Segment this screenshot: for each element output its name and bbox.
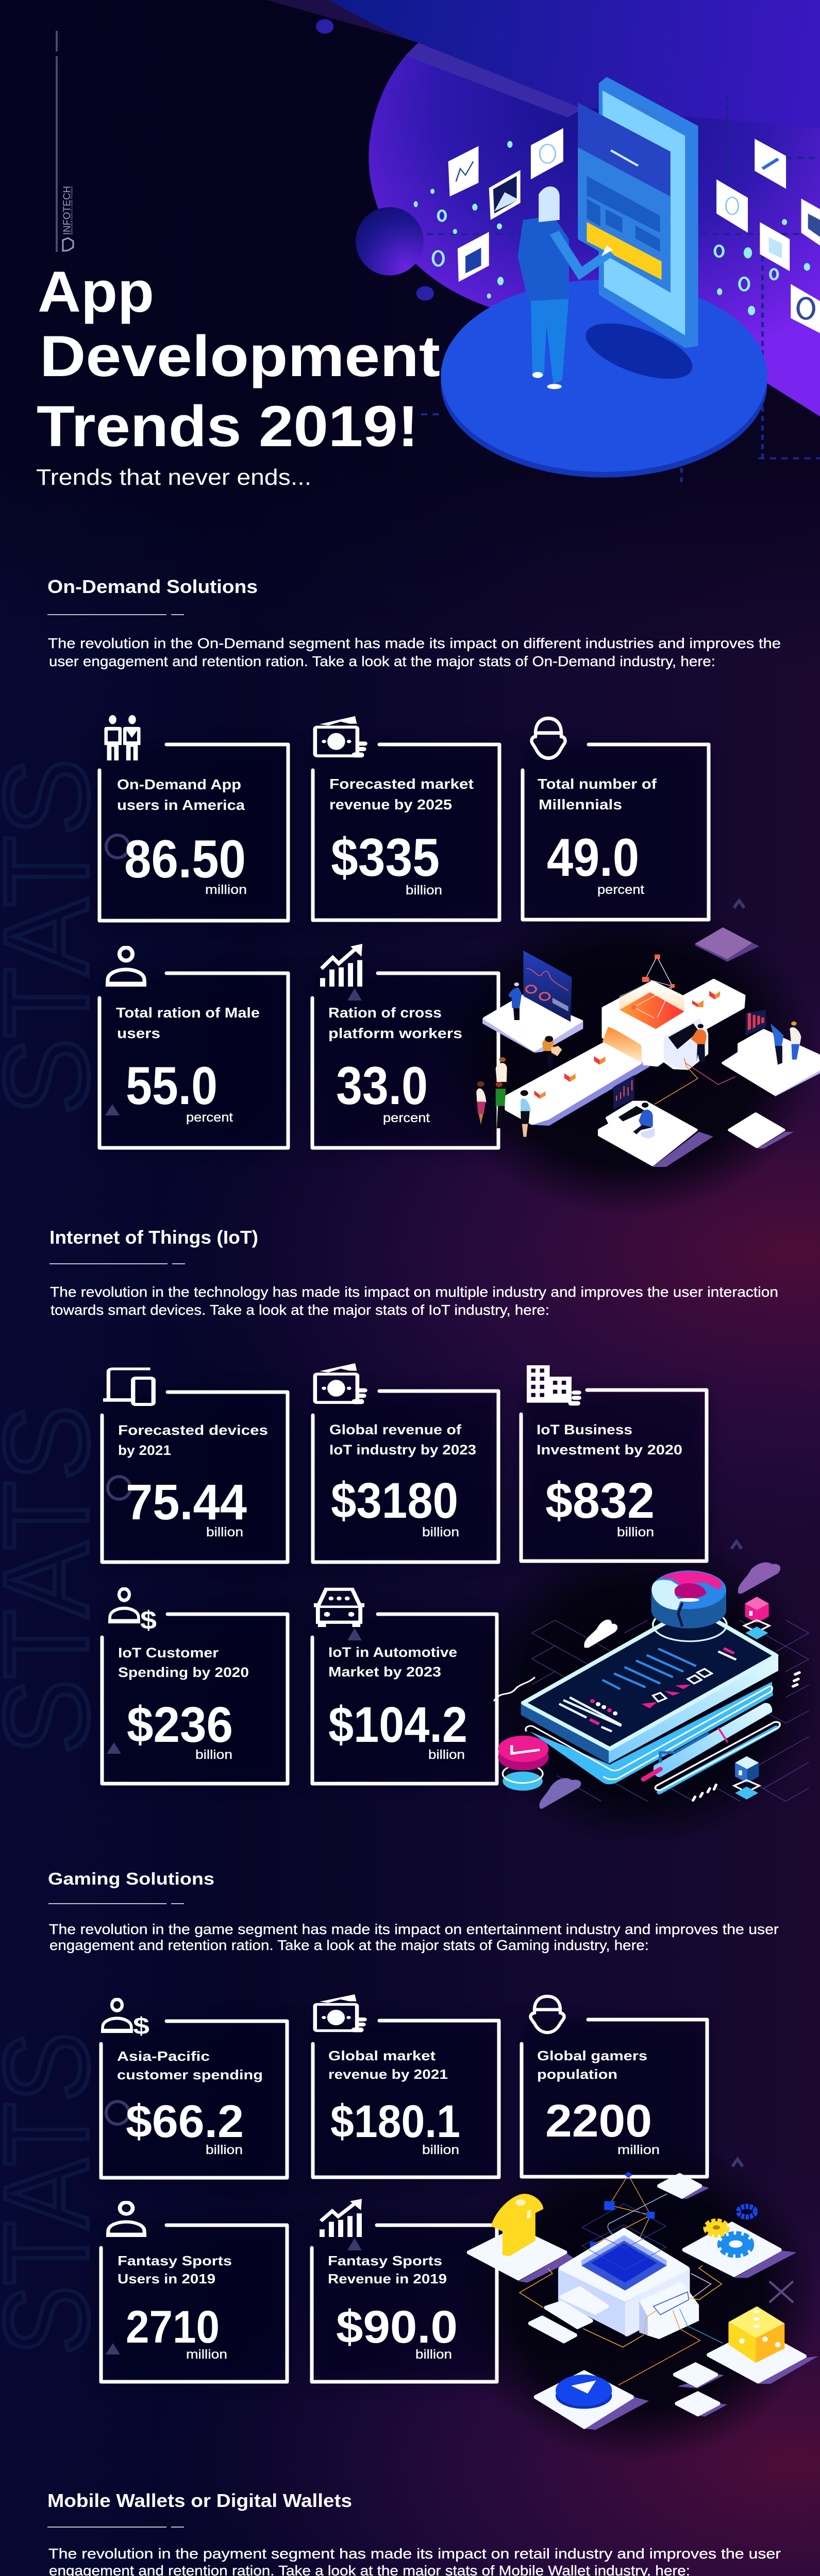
intro text: The revolution in the game segment has made its impact on entertainment industry and improves the user <box>49 1921 779 1937</box>
title: Development <box>40 324 440 388</box>
value: 49.0 <box>547 828 639 888</box>
icon: person with dollar: $ <box>140 1606 157 1635</box>
unit: million <box>186 2347 227 2362</box>
card label: Forecasted market <box>329 776 474 792</box>
card label <box>328 1645 457 1680</box>
value: 2710 <box>126 2301 220 2352</box>
intro text: engagement and retention ration. Take a look at the major stats of Gaming industry, here: <box>49 1937 649 1953</box>
icon: growth <box>320 2199 362 2237</box>
value: $236 <box>127 1697 233 1753</box>
icon: person <box>106 2202 146 2237</box>
unit: billion <box>406 883 442 897</box>
floating app icons <box>448 128 820 333</box>
card: business investment <box>521 1365 707 1561</box>
unit: billion <box>206 1525 243 1539</box>
card label: revenue by 2021 <box>328 2066 448 2082</box>
value: $3180 <box>331 1472 458 1529</box>
intro text: towards smart devices. Take a look at the major stats of IoT industry, here: <box>51 1302 549 1318</box>
card label: Revenue in 2019 <box>328 2271 447 2286</box>
icon: person with dollar <box>101 1999 149 2039</box>
card label <box>537 1422 682 1458</box>
card: cross platform <box>312 944 498 1148</box>
card: Asia-Pacific <box>101 1999 287 2178</box>
platform disc <box>441 280 767 478</box>
section: Mobile Wallets <box>47 2490 820 2576</box>
illustration: isometric tablet <box>494 1563 809 1809</box>
unit: billion <box>422 1525 459 1539</box>
intro text: The revolution in the On-Demand segment has made its impact on different industries and improves the <box>48 635 781 651</box>
card: automotive <box>312 1589 497 1784</box>
card label: Millennials <box>539 796 622 812</box>
value: 33.0 <box>336 1056 428 1116</box>
dark halos behind the stat cards <box>98 744 709 2576</box>
card label: On-Demand App <box>117 776 241 792</box>
value: $104.2 <box>328 1697 467 1753</box>
card label: by 2021 <box>118 1443 171 1458</box>
card label <box>329 776 474 812</box>
icon: person with dollar <box>108 1589 157 1635</box>
value: $832 <box>545 1472 655 1529</box>
card label: revenue by 2025 <box>329 796 452 812</box>
card label <box>118 1645 249 1680</box>
icon: car <box>314 1589 364 1627</box>
card: forecasted devices <box>102 1369 288 1562</box>
illustration: isometric factory <box>476 927 820 1167</box>
card label: Global market <box>328 2048 436 2063</box>
card label: Fantasy Sports <box>118 2253 232 2268</box>
card label: Market by 2023 <box>328 1664 441 1680</box>
card label: users <box>117 1025 160 1041</box>
brand strip: vertical line and rotated logo: INFOTECH <box>62 186 73 235</box>
unit: billion <box>428 1748 465 1762</box>
card label <box>118 2253 232 2286</box>
icon: head <box>531 718 565 758</box>
card label: IoT Customer <box>118 1645 219 1660</box>
card label <box>118 1422 268 1458</box>
card label <box>538 776 657 812</box>
card label: Global gamers <box>537 2048 647 2063</box>
title: App <box>38 260 154 324</box>
card label: Asia-Pacific <box>117 2048 210 2064</box>
card label: Forecasted devices <box>118 1422 268 1438</box>
unit: million <box>617 2143 660 2157</box>
intro text: user engagement and retention ration. Take a look at the major stats of On-Demand industry, here: <box>49 653 715 669</box>
icon: money <box>315 1363 367 1404</box>
unit: billion <box>617 1525 654 1539</box>
card label: Total ration of Male <box>116 1005 260 1021</box>
teal dots and rings <box>414 141 810 315</box>
card: global gamers <box>522 1996 707 2177</box>
section: Gaming Solutions <box>48 1869 818 2430</box>
card label: population <box>537 2066 617 2082</box>
card: global revenue <box>313 1363 498 1562</box>
unit: percent <box>186 1110 233 1125</box>
icon: building <box>527 1365 581 1405</box>
icon: head <box>530 1996 564 2032</box>
value: 55.0 <box>126 1056 217 1116</box>
heading: On-Demand Solutions <box>47 576 258 597</box>
card label: Users in 2019 <box>118 2271 215 2286</box>
card label <box>117 776 245 813</box>
value: $180.1 <box>330 2095 460 2147</box>
card label: IoT Business <box>537 1422 632 1437</box>
heading: Gaming Solutions <box>48 1869 214 1888</box>
card label <box>117 2048 263 2082</box>
small decorative rings and triangles <box>103 835 744 2576</box>
card: market revenue <box>313 716 499 920</box>
card label: Global revenue of <box>329 1422 462 1437</box>
card: male users <box>99 947 288 1148</box>
card: fantasy users <box>101 2202 287 2382</box>
brand strip: vertical line and rotated logo: IMAGINATION IS OUR POWER <box>71 185 74 235</box>
intro text <box>48 635 781 669</box>
section: On-Demand Solutions <box>47 576 820 1167</box>
card label: Investment by 2020 <box>537 1442 682 1458</box>
illustration: isometric gaming <box>468 2172 818 2430</box>
card label <box>328 1005 462 1041</box>
unit: million <box>205 883 247 897</box>
hero background shape <box>266 0 820 416</box>
dark halos behind the illustrations <box>411 896 820 2576</box>
section: Internet of Things <box>49 1227 809 1809</box>
value: 86.50 <box>124 829 246 889</box>
dotted circuit lines <box>392 96 820 487</box>
card label: platform workers <box>328 1025 462 1041</box>
card: fantasy revenue <box>312 2199 497 2382</box>
card: customer spending <box>102 1589 288 1784</box>
card label <box>116 1005 260 1041</box>
phone <box>578 77 698 348</box>
heading: Internet of Things (IoT) <box>49 1227 258 1248</box>
hero illustration: phone on platform <box>266 0 820 487</box>
card label: Fantasy Sports <box>328 2253 442 2268</box>
value: 2200 <box>545 2095 652 2146</box>
STATS watermarks <box>0 758 113 2576</box>
icon: growth <box>320 944 362 987</box>
brand strip: vertical line and rotated logo <box>56 31 74 252</box>
intro text: The revolution in the technology has made its impact on multiple industry and improves the user interaction <box>50 1284 778 1300</box>
card label: IoT in Automotive <box>328 1645 457 1660</box>
card label: IoT industry by 2023 <box>329 1442 476 1458</box>
card label <box>537 2048 647 2082</box>
card: On-Demand App users <box>99 715 288 921</box>
unit: billion <box>206 2143 243 2157</box>
card label <box>328 2048 448 2082</box>
card label <box>329 1422 476 1458</box>
card label <box>328 2253 447 2286</box>
card label: customer spending <box>117 2067 263 2082</box>
card: global market <box>313 1994 499 2177</box>
subtitle: Trends that never ends... <box>36 465 311 490</box>
icon: devices <box>103 1369 154 1404</box>
icon: money <box>315 1994 367 2032</box>
value: 75.44 <box>126 1474 247 1530</box>
icon: person with dollar: $ <box>133 2012 149 2039</box>
intro text <box>48 2546 781 2576</box>
value: $335 <box>331 828 440 888</box>
unit: percent <box>383 1111 430 1125</box>
unit: billion <box>415 2347 452 2362</box>
unit: percent <box>597 883 644 897</box>
person touching the phone <box>518 187 613 389</box>
icon: couple <box>104 715 141 760</box>
card label: Spending by 2020 <box>118 1665 249 1680</box>
intro text <box>50 1284 778 1318</box>
intro text <box>49 1921 779 1953</box>
title <box>37 260 440 459</box>
unit: billion <box>195 1748 232 1762</box>
heading: Mobile Wallets or Digital Wallets <box>47 2490 352 2511</box>
unit: billion <box>422 2143 459 2157</box>
title: Trends 2019! <box>37 394 419 459</box>
value: $66.2 <box>126 2095 244 2147</box>
intro text: The revolution in the payment segment has made its impact on retail industry and improves the user <box>48 2546 781 2562</box>
card label: users in America <box>117 797 245 813</box>
card: Millennials <box>523 718 709 920</box>
value: $90.0 <box>336 2301 458 2352</box>
icon: person <box>106 947 146 987</box>
card label: Total number of <box>538 776 657 792</box>
icon: money <box>315 716 367 757</box>
card label: Ration of cross <box>328 1005 442 1021</box>
